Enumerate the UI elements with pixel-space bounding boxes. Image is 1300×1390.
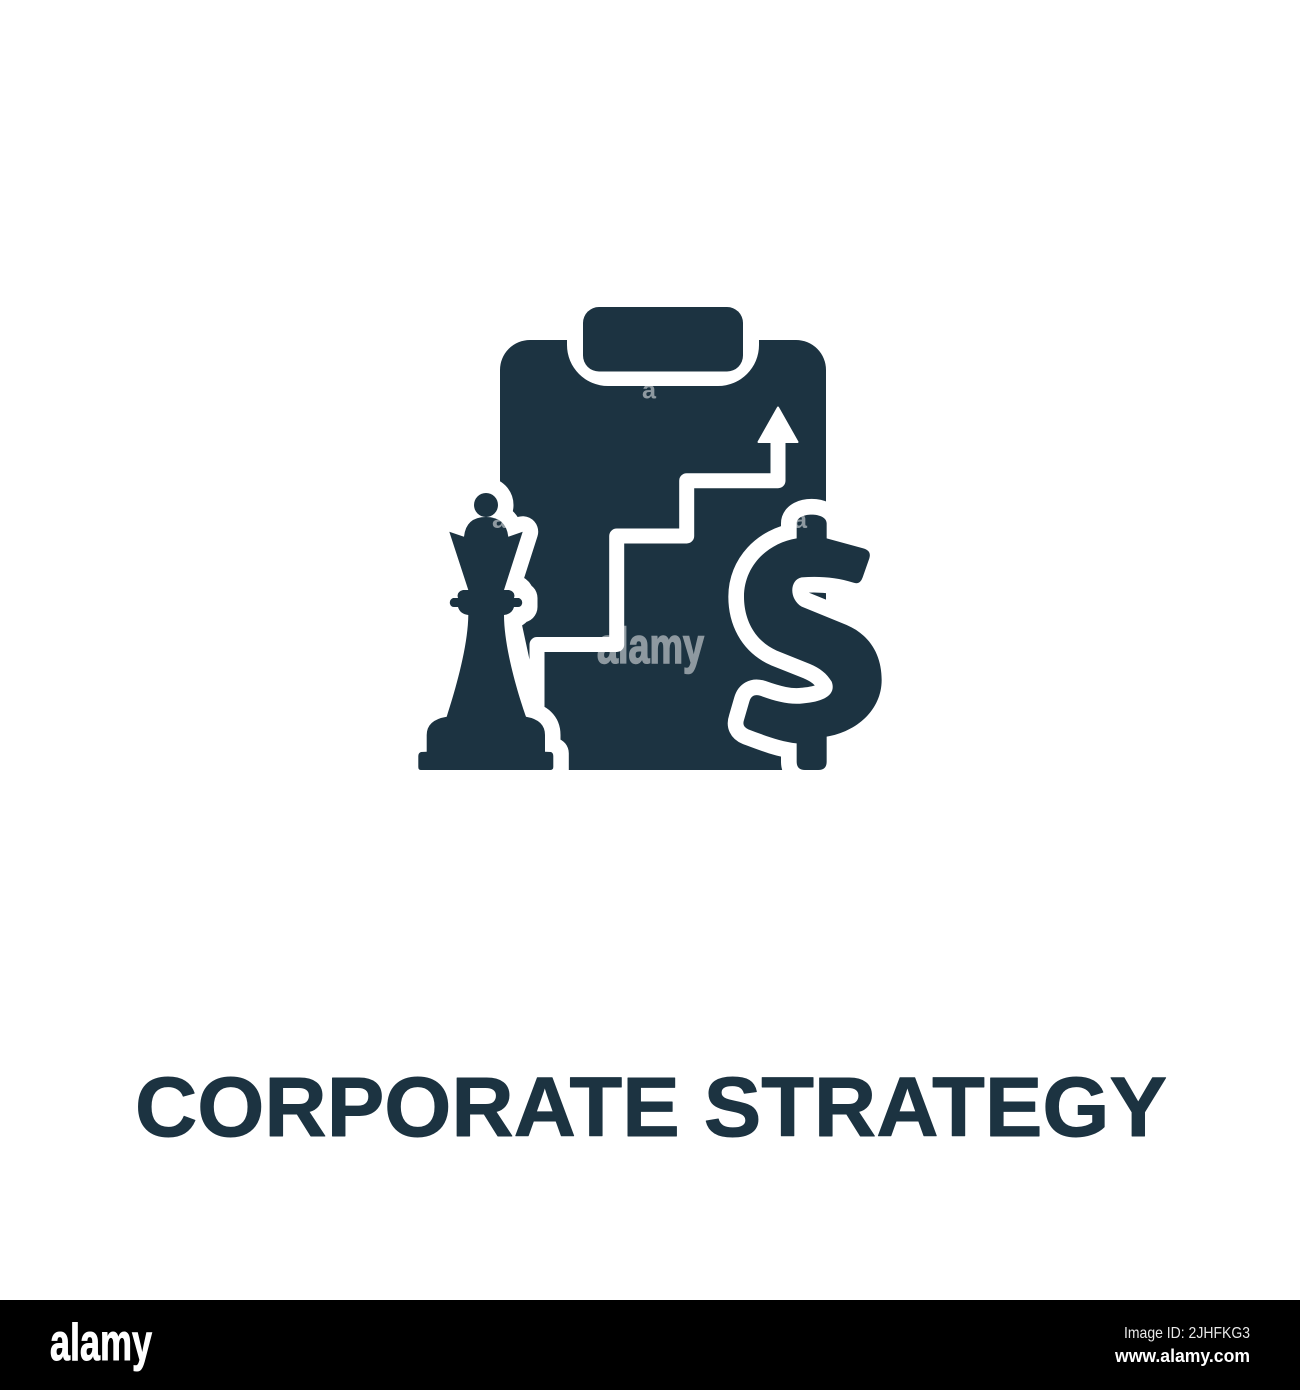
icon: rising stair arrow [537, 408, 798, 725]
title: CORPORATE STRATEGY [135, 1060, 1167, 1154]
icon: clipboard board [500, 307, 826, 770]
bottom edge mask [400, 770, 900, 790]
watermark: small fragments: a [492, 506, 508, 534]
website: www.alamy.com [1114, 1346, 1250, 1366]
icon: chess queen [418, 493, 553, 770]
watermark: small fragments [492, 376, 808, 534]
footer logo: alamy [50, 1314, 152, 1372]
icon: dollar sign [743, 515, 882, 770]
watermark: alamy centre: alamy [597, 618, 704, 674]
watermark: small fragments: a [793, 506, 808, 534]
watermark: small fragments: a [642, 376, 657, 404]
icon: corporate strategy [400, 307, 900, 790]
image id: Image ID: 2JHFKG3 [1124, 1325, 1250, 1342]
footer bar [0, 1300, 1300, 1390]
